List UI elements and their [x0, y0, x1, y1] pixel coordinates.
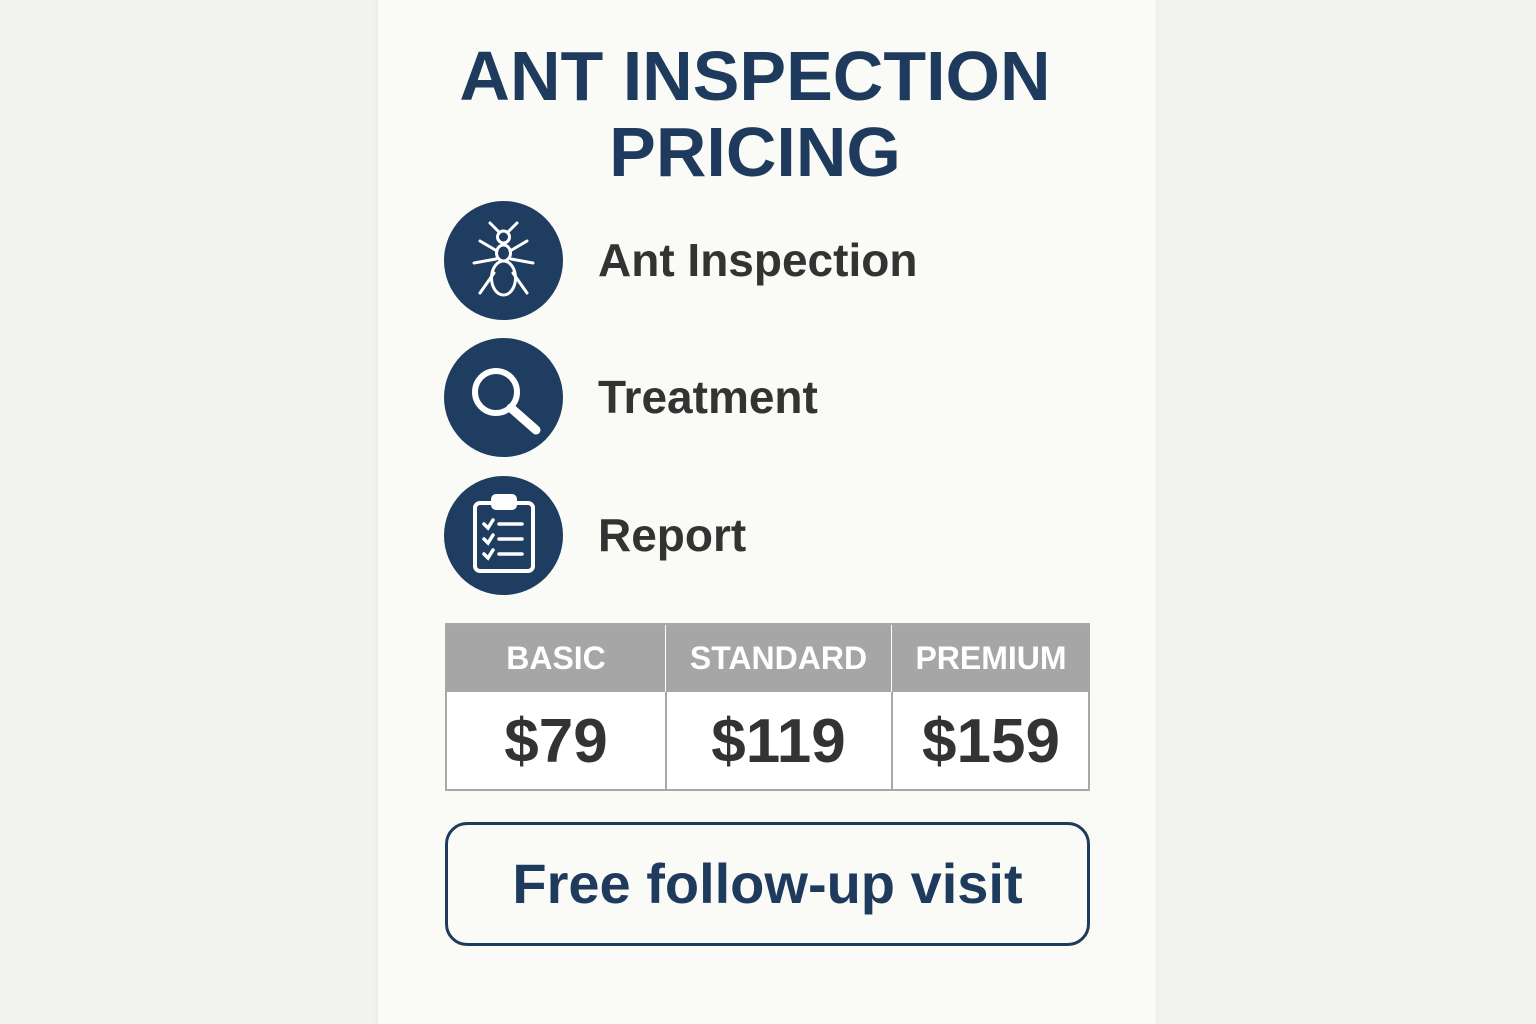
header: basic: [447, 625, 665, 692]
item: treatment: [444, 338, 818, 457]
title: ANT INSPECTION: [459, 37, 1051, 115]
header: premium: PREMIUM: [915, 640, 1067, 676]
panel: main card: [378, 0, 1156, 1024]
callout button: [445, 822, 1090, 946]
price: basic: $79: [504, 707, 608, 776]
icon: clipboard: [444, 476, 563, 595]
header: premium: [892, 625, 1090, 692]
item: report: [444, 476, 746, 595]
price: basic: [447, 692, 667, 791]
label: Ant Inspection: [598, 234, 917, 286]
icon: ant: [444, 201, 563, 320]
header: standard: [666, 625, 891, 692]
title: PRICING: [609, 113, 901, 191]
label: Report: [598, 509, 746, 561]
header: basic: BASIC: [506, 640, 606, 676]
item: ant inspection: [444, 201, 917, 320]
callout button: Free follow-up visit: [512, 852, 1023, 915]
pricing table: [445, 623, 1090, 791]
price: standard: [666, 692, 893, 791]
icon: magnifier: [444, 338, 563, 457]
price: standard: $119: [711, 707, 846, 776]
price: premium: $159: [922, 707, 1060, 776]
title: [459, 37, 1051, 191]
header: standard: STANDARD: [690, 640, 867, 676]
label: Treatment: [598, 371, 818, 423]
